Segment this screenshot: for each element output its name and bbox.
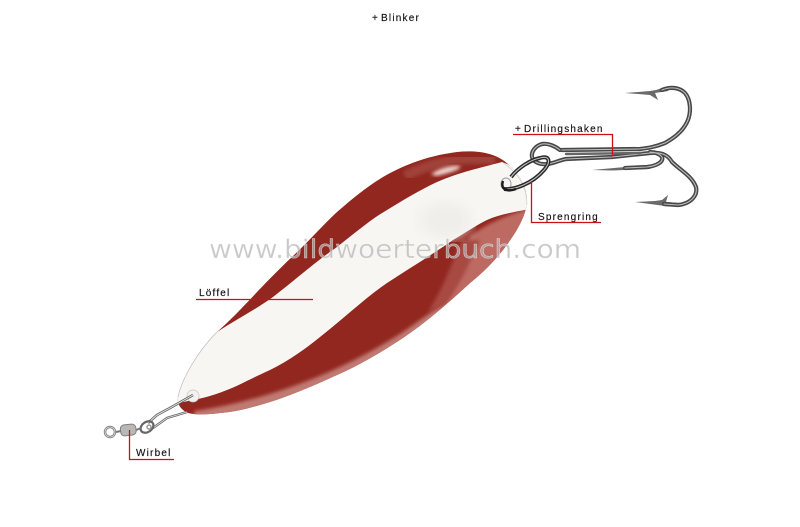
lure hole rear	[501, 178, 511, 190]
wire	[148, 395, 193, 423]
small loop	[138, 419, 156, 435]
hook barbs	[592, 86, 680, 207]
neck between eye and barrel	[116, 431, 121, 432]
label: Wirbel: Wirbel	[136, 448, 172, 459]
lighter lower edge	[192, 234, 514, 414]
label: Wirbel	[130, 430, 174, 460]
label: Sprengring	[532, 182, 601, 223]
swivel	[105, 395, 193, 437]
treble hook	[532, 86, 696, 207]
lighter right patch	[442, 210, 526, 308]
watermark: www.bildwoerterbuch.com	[209, 235, 581, 265]
neck between barrel and loop	[136, 428, 141, 430]
label: Löffel	[196, 288, 313, 300]
title: Blinker: + Blinker	[372, 13, 420, 24]
upper highlight	[431, 166, 460, 176]
barrel	[120, 424, 137, 436]
left eye	[105, 427, 115, 437]
spoon lure body	[178, 151, 528, 414]
white stripe	[165, 162, 535, 404]
label: Drillingshaken	[513, 124, 612, 156]
label: Drillingshaken: + Drillingshaken	[515, 124, 604, 135]
label: Löffel: Löffel	[199, 288, 230, 299]
lure hole front	[187, 390, 199, 402]
label: Sprengring: Sprengring	[538, 212, 599, 223]
upper soft band	[405, 159, 495, 176]
split ring	[502, 157, 549, 190]
